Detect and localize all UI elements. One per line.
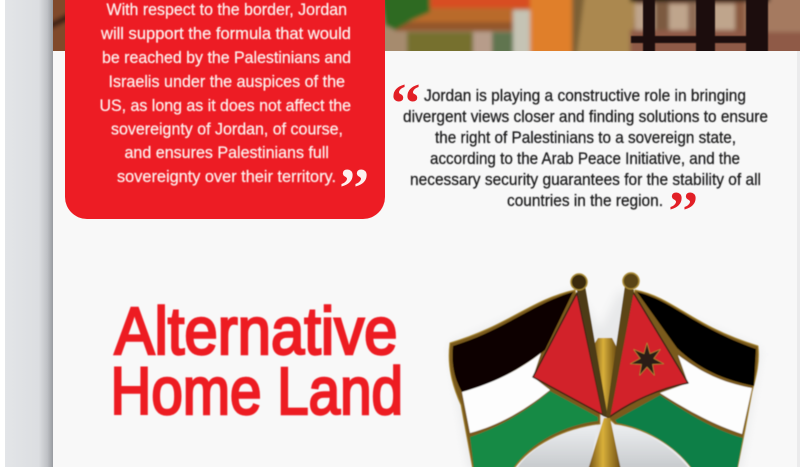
quote text in red box: sovereignty of Jordan, of course, xyxy=(111,120,343,138)
icon: seven-point star xyxy=(630,343,664,375)
quote text in red box xyxy=(100,0,351,186)
quote text in red box: will support the formula that would xyxy=(100,24,351,43)
side quote text: countries in the region. xyxy=(507,192,663,210)
panel: red quote box xyxy=(65,0,385,220)
icon: red closing quote: ’’ xyxy=(667,181,700,243)
right flag: Jordan xyxy=(607,290,758,467)
side quote text: Jordan is playing a constructive role in bringing xyxy=(424,87,746,105)
side quote text xyxy=(403,87,768,210)
left flag: Palestine xyxy=(449,290,603,467)
quote text in red box: Israelis under the auspices of the xyxy=(108,72,345,91)
flag poles xyxy=(571,273,639,467)
quote text in red box: be reached by the Palestinians and xyxy=(102,48,351,67)
quote text in red box: sovereignty over their territory. xyxy=(117,167,336,186)
side quote text: necessary security guarantees for the stability of all xyxy=(410,171,761,189)
icon: red opening quote: ‘‘ xyxy=(389,73,422,135)
photo strip xyxy=(45,0,800,62)
side quote text: according to the Arab Peace Initiative, and the xyxy=(430,150,740,168)
silver backing xyxy=(516,425,690,467)
quote text in red box: US, as long as it does not affect the xyxy=(100,96,351,115)
title: Home Land xyxy=(110,354,403,429)
quote text in red box: With respect to the border, Jordan xyxy=(106,0,347,19)
icon: white closing quote: ’’ xyxy=(338,158,371,220)
side quote text: divergent views closer and finding solutions to ensure xyxy=(403,108,768,126)
title xyxy=(110,294,403,429)
icon: crossed Palestine and Jordan flag pin xyxy=(449,273,760,467)
title: Alternative xyxy=(114,294,398,369)
quote text in red box: and ensures Palestinians full xyxy=(124,143,329,162)
side quote text: the right of Palestinians to a sovereign state, xyxy=(435,129,736,147)
side quote xyxy=(389,73,768,243)
